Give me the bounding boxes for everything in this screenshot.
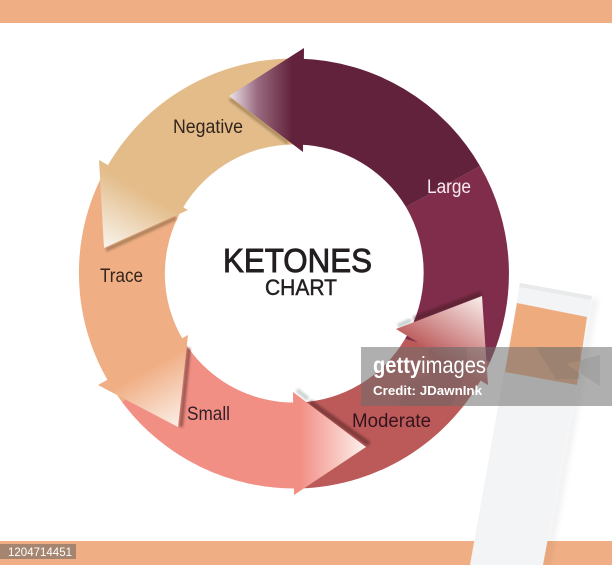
label: Small: Small [187, 404, 230, 425]
arrow: negative head [99, 160, 188, 250]
top banner [0, 0, 612, 23]
segment: moderate [300, 339, 490, 488]
watermark band [361, 347, 612, 406]
trace head fill [98, 335, 188, 427]
segment: small [122, 346, 300, 488]
negative head shadow [106, 218, 176, 250]
large head fill [229, 48, 304, 152]
label: Trace: Trace [100, 266, 143, 287]
segment: trace [79, 180, 187, 402]
strip colour pad [505, 303, 587, 385]
moderate head shadow [414, 294, 481, 319]
segment: large upper band [300, 59, 480, 207]
large head shadow [230, 99, 288, 143]
title [223, 242, 372, 300]
watermark background [361, 347, 612, 406]
tag background [0, 544, 76, 559]
test strip [470, 283, 598, 565]
label: Negative: Negative [173, 117, 243, 138]
arrow: moderate head [396, 294, 488, 385]
title: KETONES: KETONES [223, 242, 372, 279]
arrow: large head [229, 48, 304, 152]
small head off-ring shadow [297, 390, 308, 399]
segment: large lower band [405, 166, 509, 362]
bottom banner [0, 541, 612, 565]
strip soft shadow [543, 296, 598, 565]
negative head fill [99, 160, 188, 248]
small head fill [293, 392, 366, 495]
image id tag [0, 544, 76, 559]
arrow: small head [293, 390, 369, 495]
small head shadow [310, 402, 369, 444]
moderate head off-ring shadow [398, 320, 411, 326]
strip body [470, 283, 592, 565]
watermark ghost shapes [399, 347, 600, 406]
label: Moderate: Moderate [352, 411, 431, 432]
strip top edge [519, 283, 592, 300]
watermark credit: Credit: JDawnInk [373, 383, 483, 398]
tag number: 1204714451 [8, 545, 72, 559]
moderate head fill [396, 296, 488, 385]
ketones ring chart [79, 48, 509, 495]
title: CHART: CHART [265, 275, 337, 300]
watermark logo: gettyimages [373, 352, 486, 378]
trace head shadow [181, 348, 189, 427]
segment: negative [100, 58, 295, 217]
arrow: trace head [98, 335, 189, 427]
label: Large: Large [427, 177, 471, 198]
